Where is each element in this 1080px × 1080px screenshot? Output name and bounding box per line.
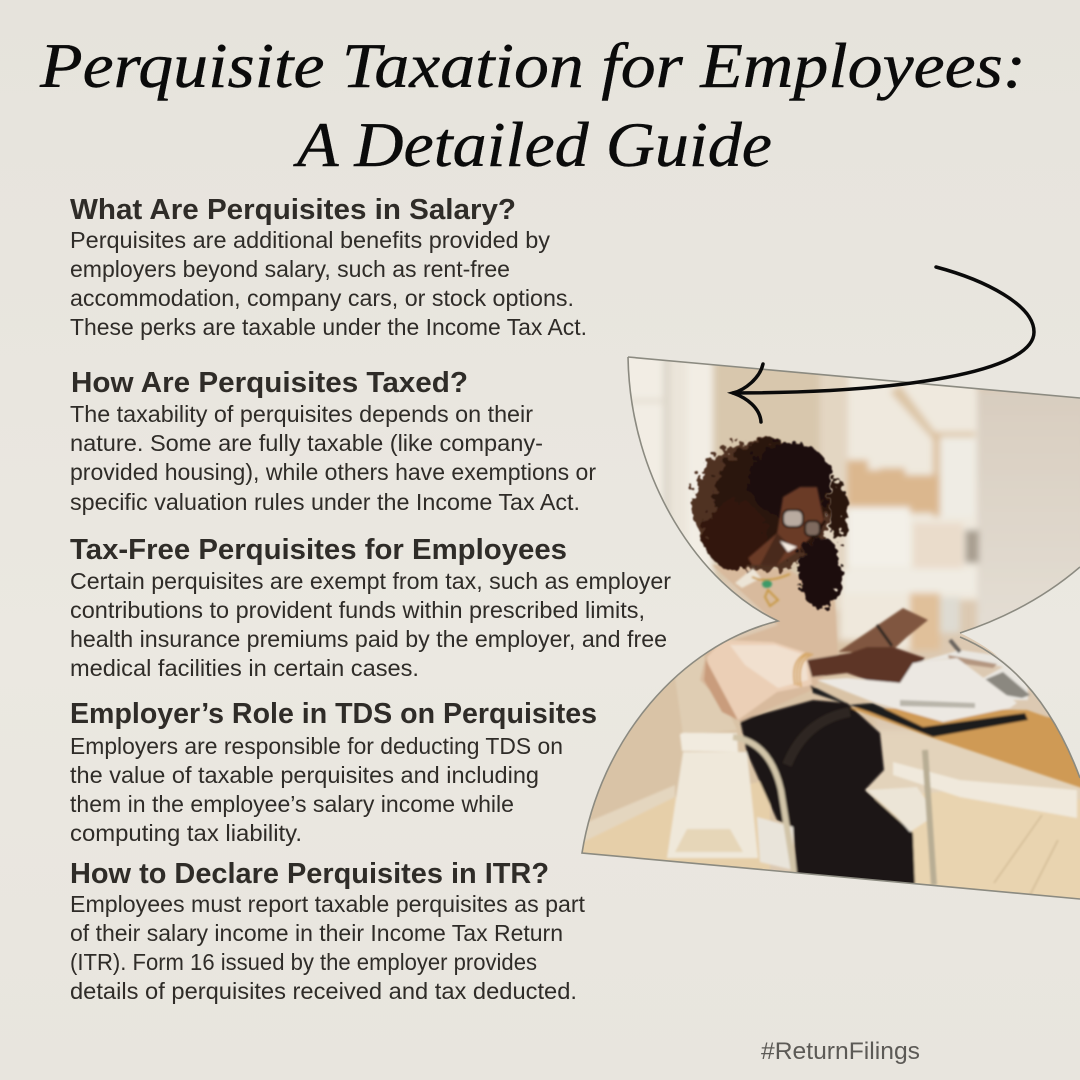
chair tube	[733, 737, 794, 872]
paper stack	[817, 658, 1017, 722]
title: A Detailed Guide	[293, 109, 772, 180]
text block: what are perquisites	[70, 227, 587, 340]
phone	[948, 655, 997, 668]
text block: declare in ITR	[70, 891, 586, 1004]
text block: tax-free: health insurance premiums paid by the employer, and free	[70, 626, 667, 652]
hair	[692, 439, 832, 571]
text block: what are perquisites: accommodation, company cars, or stock options.	[70, 285, 574, 311]
text block: how taxed: provided housing), while others have exemptions or	[70, 459, 596, 485]
text block: employer role	[70, 733, 563, 846]
heading: declare in ITR: How to Declare Perquisites in ITR?	[70, 858, 549, 890]
bracelets	[794, 653, 813, 687]
folder	[810, 685, 1028, 737]
laptop	[915, 650, 1028, 700]
text block: tax-free: medical facilities in certain cases.	[70, 655, 419, 681]
text block: employer role: the value of taxable perquisites and including	[70, 762, 539, 788]
chair back	[675, 655, 737, 735]
title: Perquisite Taxation for Employees:	[39, 30, 1026, 101]
section: declare in ITR	[70, 858, 586, 1004]
trousers	[740, 700, 915, 885]
necklace	[752, 574, 790, 580]
forearm and hand	[807, 647, 925, 687]
floor	[583, 780, 772, 870]
text block: declare in ITR: (ITR). Form 16 issued by the employer provides	[70, 949, 537, 975]
text block: declare in ITR: Employees must report taxable perquisites as part	[70, 891, 586, 917]
section: tax-free	[70, 534, 671, 681]
tablet	[838, 608, 928, 652]
text block: tax-free: Certain perquisites are exempt from tax, such as employer	[70, 568, 671, 594]
collar	[735, 568, 761, 588]
text block: how taxed	[70, 401, 596, 515]
text block: how taxed: The taxability of perquisites depends on their	[70, 401, 533, 427]
text block: what are perquisites: employers beyond salary, such as rent-free	[70, 256, 510, 282]
torso	[700, 565, 838, 722]
section: employer role	[70, 698, 597, 846]
text block: what are perquisites: These perks are taxable under the Income Tax Act.	[70, 314, 587, 340]
table leg	[925, 750, 934, 885]
text block: employer role: computing tax liability.	[70, 820, 302, 846]
text block: employer role: them in the employee’s salary income while	[70, 791, 514, 817]
text block: declare in ITR: of their salary income in their Income Tax Return	[70, 920, 563, 946]
text block: declare in ITR: details of perquisites received and tax deducted.	[70, 978, 577, 1004]
text block: what are perquisites: Perquisites are additional benefits provided by	[70, 227, 551, 253]
title	[39, 30, 1026, 180]
glasses	[783, 510, 803, 527]
heading: how taxed: How Are Perquisites Taxed?	[71, 367, 468, 399]
sleeve	[707, 640, 812, 720]
footer hashtag: #ReturnFilings	[761, 1038, 920, 1065]
section: how taxed	[70, 367, 596, 515]
arrow: curved pointer to photo	[733, 267, 1034, 422]
heading: employer role: Employer’s Role in TDS on Perquisites	[70, 698, 597, 730]
chair body	[667, 752, 758, 858]
section: what are perquisites	[70, 194, 587, 340]
right seat	[867, 787, 928, 832]
heading: tax-free: Tax-Free Perquisites for Employees	[70, 534, 567, 566]
photo: woman working at a desk	[570, 340, 1080, 910]
text block: tax-free: contributions to provident funds within prescribed limits,	[70, 597, 645, 623]
table	[850, 708, 1080, 789]
heading: what are perquisites: What Are Perquisites in Salary?	[70, 194, 516, 226]
text block: tax-free	[70, 568, 671, 681]
text block: how taxed: nature. Some are fully taxable (like company-	[70, 430, 543, 456]
text block: how taxed: specific valuation rules under the Income Tax Act.	[70, 489, 580, 515]
hair over right shoulder	[798, 478, 846, 608]
text block: employer role: Employers are responsible for deducting TDS on	[70, 733, 563, 759]
face	[748, 487, 824, 565]
smile	[780, 541, 797, 552]
lower wall	[575, 640, 875, 860]
